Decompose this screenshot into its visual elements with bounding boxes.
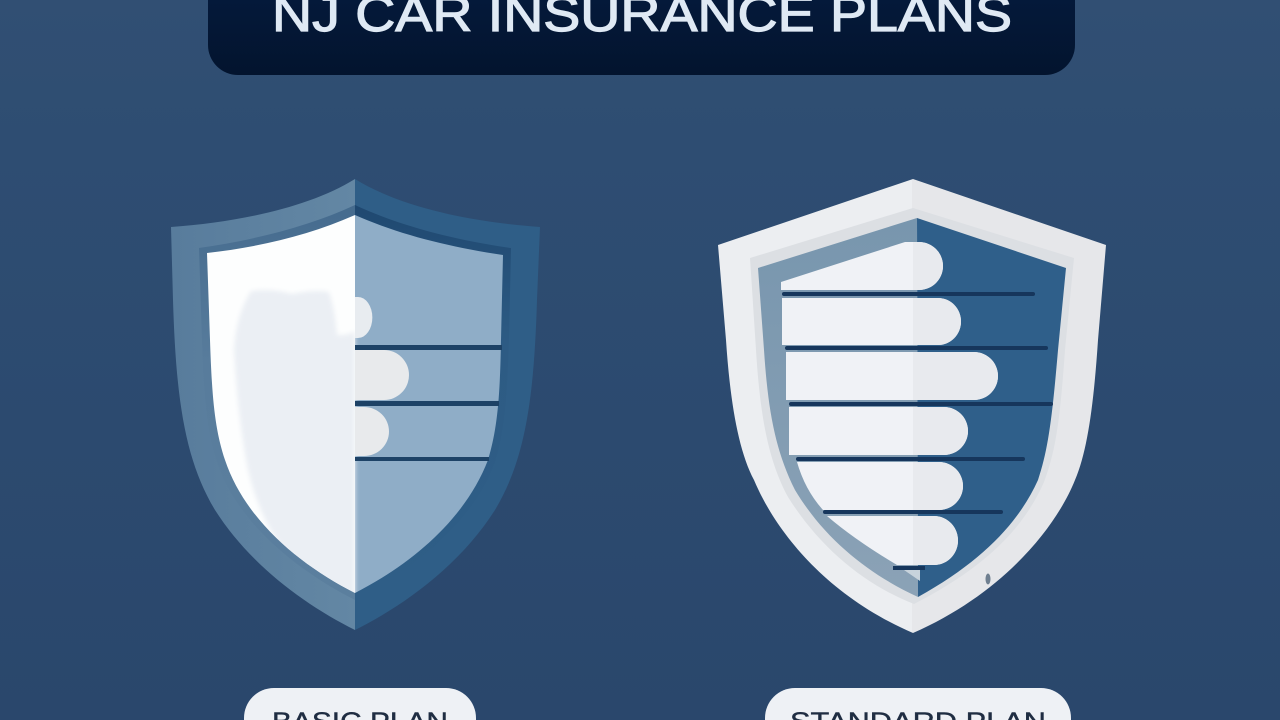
small blemish <box>986 574 990 584</box>
blue inner panel <box>917 218 1066 597</box>
small notch highlight <box>904 570 920 581</box>
shield light blue half <box>355 215 503 593</box>
icon: basic plan shield <box>171 179 540 630</box>
shield grey rim <box>750 208 1074 604</box>
shield outer frame, right half <box>355 179 540 630</box>
finger shading <box>913 242 998 565</box>
icon: standard plan shield <box>718 179 1106 633</box>
finger bands <box>355 297 409 456</box>
divider lines <box>355 345 502 461</box>
shield outer frame <box>718 179 1106 633</box>
label: basic plan <box>244 688 476 720</box>
worn patch on white half <box>234 290 355 600</box>
label: standard plan <box>765 688 1071 720</box>
divider lines <box>782 292 1053 570</box>
shield outer frame, left half <box>171 179 355 630</box>
shield inner shadow, right <box>355 205 511 600</box>
title banner <box>208 0 1075 75</box>
steel inner band <box>758 218 918 597</box>
fingers <box>781 242 998 565</box>
shield inner shadow, left <box>199 205 355 600</box>
shield white half <box>207 215 355 593</box>
